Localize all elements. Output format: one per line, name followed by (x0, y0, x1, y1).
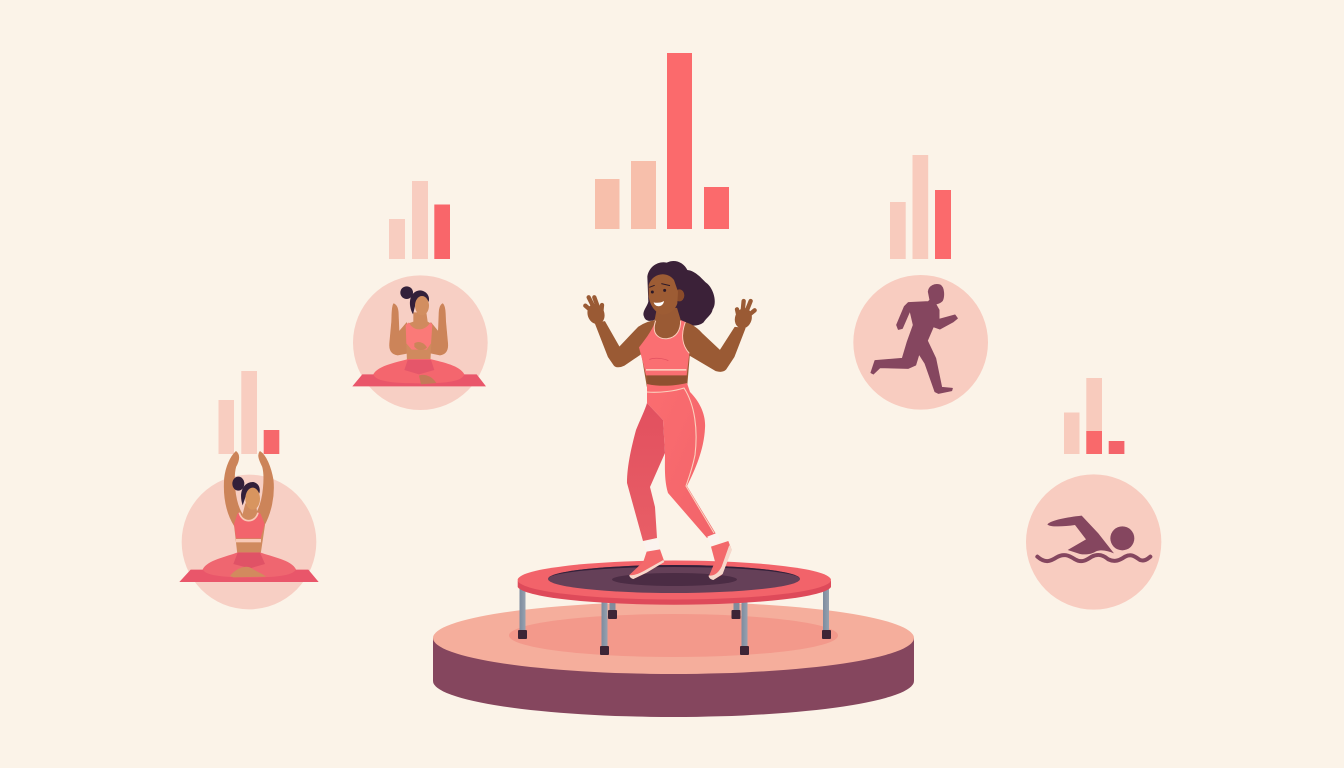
back legs (608, 600, 740, 619)
center bar chart (595, 53, 729, 229)
icon: seated yoga figure (352, 275, 488, 410)
sports top (639, 320, 689, 375)
swimming bar chart (1064, 378, 1124, 454)
running bar chart (890, 155, 951, 259)
yoga seated bar chart (389, 181, 450, 259)
icon: runner (853, 275, 988, 410)
trampoline (518, 560, 831, 655)
mat (548, 565, 800, 593)
icon: swimmer (1026, 474, 1161, 610)
back hair (643, 261, 715, 326)
front legs (518, 588, 831, 655)
shoes and socks (629, 533, 732, 580)
frame rim (518, 581, 831, 605)
icon: yoga figure with raised arms (179, 452, 319, 609)
leggings (627, 383, 716, 541)
platform (433, 602, 914, 717)
arms and torso skin (585, 297, 755, 387)
face (649, 274, 684, 315)
central jumping woman (585, 261, 755, 580)
yoga arms-raised bar chart (218, 371, 279, 454)
